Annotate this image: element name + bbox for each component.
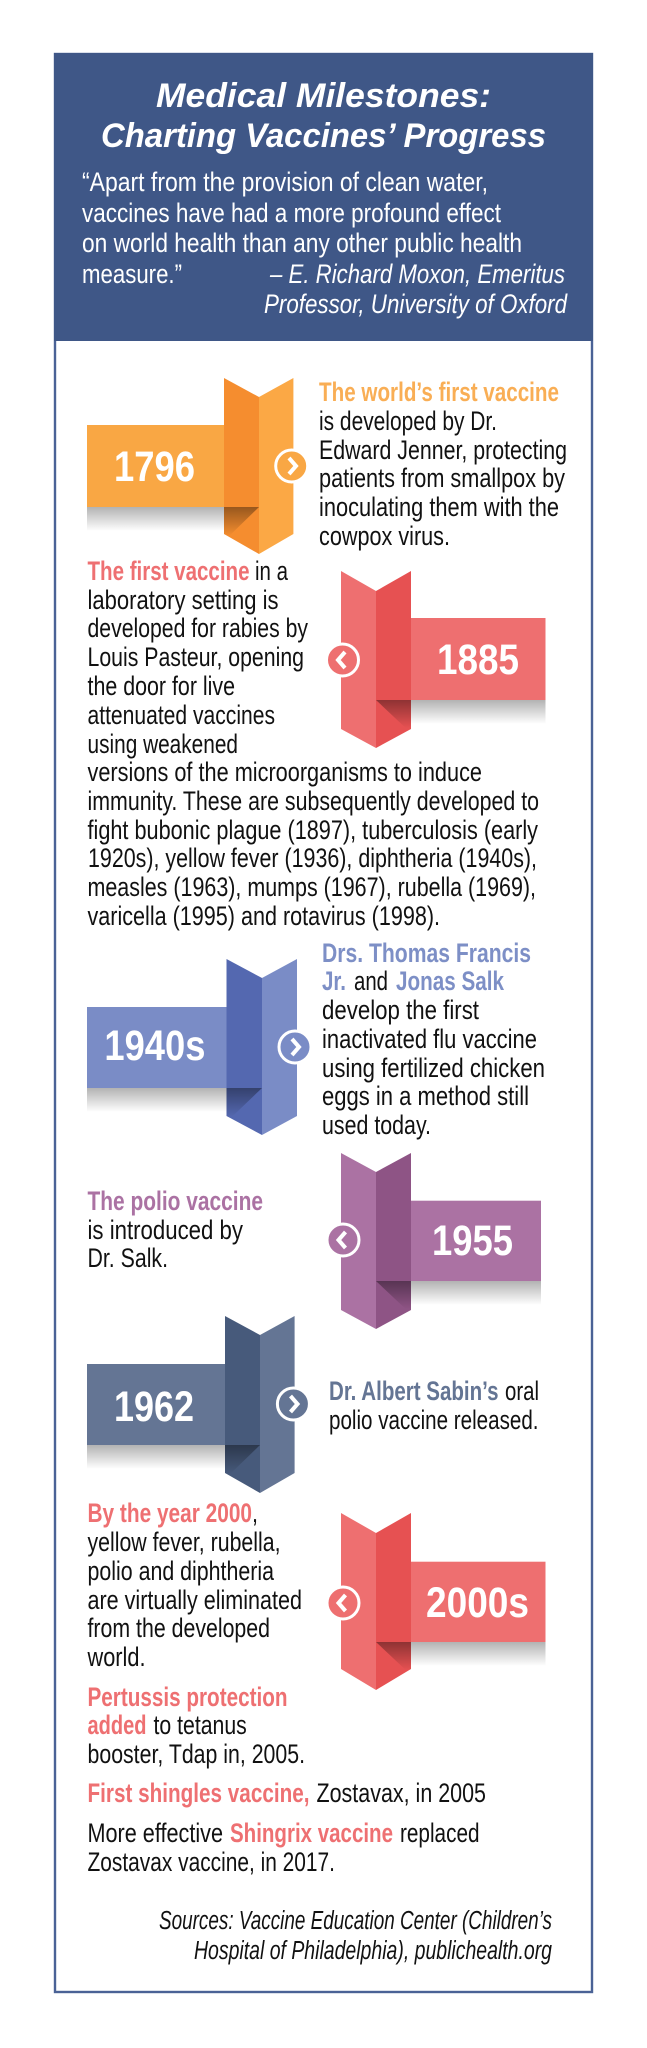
text: 1885: fight bubonic plague (1897), tuberculosis (early	[88, 815, 539, 845]
text: 1885: in a	[255, 556, 288, 586]
text: 1885: developed for rabies by	[88, 613, 309, 643]
text: 1885: versions of the microorganisms to induce	[88, 757, 482, 787]
text: 1940s: inactivated flu vaccine	[322, 1024, 537, 1054]
ribbon: 1955	[327, 1153, 541, 1329]
ribbon: 1796	[87, 378, 308, 554]
text: 2000s eradication: polio and diphtheria	[88, 1556, 274, 1586]
text: 2000s eradication: are virtually eliminated	[88, 1585, 302, 1615]
text: 1955: Dr. Salk.	[88, 1243, 168, 1273]
text: 1796: inoculating them with the	[319, 492, 559, 522]
title: Medical Milestones:	[156, 77, 491, 115]
text: 1796: Edward Jenner, protecting	[319, 435, 567, 465]
text: 2000s eradication: from the developed	[88, 1613, 270, 1643]
text: first shingles vaccine: First shingles vaccine,	[88, 1778, 310, 1808]
text: 1940s: and	[354, 966, 388, 996]
text: 1885: attenuated vaccines	[88, 700, 275, 730]
text: 1796: The world’s first vaccine	[319, 377, 559, 407]
text: 1885: 1920s), yellow fever (1936), diphtheria (1940s),	[88, 843, 537, 873]
panel: page frame	[55, 54, 592, 1992]
ribbon: 1940s	[87, 959, 311, 1135]
quote attribution: Professor, University of Oxford	[264, 289, 568, 319]
title: Charting Vaccines’ Progress	[101, 117, 546, 155]
text: 1940s: Jonas Salk	[396, 966, 504, 996]
quote: “Apart from the provision of clean water,	[82, 167, 488, 197]
quote attribution: – E. Richard Moxon, Emeritus	[269, 259, 565, 289]
text: pertussis: to tetanus	[154, 1710, 247, 1740]
ribbon: 1962	[87, 1316, 309, 1493]
text: 1940s: Drs. Thomas Francis	[322, 938, 531, 968]
ribbon: 2000s: 2000s	[426, 1579, 529, 1627]
text: 1796: cowpox virus.	[319, 521, 450, 551]
text: 1955: is introduced by	[88, 1215, 244, 1245]
text: 2000s eradication: yellow fever, rubella,	[88, 1527, 280, 1557]
text: 1885: using weakened	[88, 729, 238, 759]
quote attribution	[264, 259, 568, 319]
text: 1940s: used today.	[322, 1110, 431, 1140]
panel: header	[54, 53, 593, 341]
text: Shingrix: More effective	[88, 1818, 223, 1848]
quote: measure.”	[82, 259, 182, 289]
ribbon: 1940s: 1940s	[104, 1022, 205, 1070]
ribbon: 1962: 1962	[114, 1383, 194, 1431]
text: 1962: oral	[505, 1376, 539, 1406]
text: Shingrix: Zostavax vaccine, in 2017.	[88, 1847, 335, 1877]
text: pertussis: Pertussis protection	[88, 1682, 288, 1712]
text: 2000s eradication: ,	[252, 1498, 258, 1528]
quote	[82, 167, 522, 289]
text: 1940s	[322, 938, 545, 1140]
ribbon: 1955: 1955	[432, 1217, 513, 1265]
text: 1962	[329, 1376, 539, 1435]
ribbon: 1885	[326, 571, 546, 748]
text: 1962: Dr. Albert Sabin’s	[329, 1376, 498, 1406]
text: 1885: varicella (1995) and rotavirus (1998).	[88, 901, 440, 931]
text: 1885: The first vaccine	[88, 556, 250, 586]
text: 1885: laboratory setting is	[88, 585, 278, 615]
sources	[159, 1907, 552, 1965]
text: 1955: The polio vaccine	[88, 1186, 263, 1216]
text: Shingrix: Shingrix vaccine	[230, 1818, 393, 1848]
quote: on world health than any other public health	[82, 228, 522, 258]
text: 1796: patients from smallpox by	[319, 463, 566, 493]
text: Shingrix	[88, 1818, 480, 1877]
text: 1796	[319, 377, 567, 551]
text: 1885: the door for live	[88, 671, 235, 701]
ribbon: 1885: 1885	[437, 636, 519, 684]
text: 1940s: Jr.	[322, 966, 346, 996]
text: 1940s: using fertilized chicken	[322, 1053, 545, 1083]
text: 1955	[88, 1186, 263, 1273]
ribbon: 2000s	[327, 1513, 546, 1690]
title	[101, 77, 546, 155]
text: 1962: polio vaccine released.	[329, 1405, 538, 1435]
text: 1940s: eggs in a method still	[322, 1081, 529, 1111]
text: 2000s eradication	[87, 1498, 302, 1672]
ribbon: 1796: 1796	[114, 443, 195, 491]
text: 1885: immunity. These are subsequently developed to	[88, 786, 539, 816]
text: pertussis	[88, 1682, 305, 1769]
text: 2000s eradication: By the year 2000	[88, 1498, 252, 1528]
text: 1885: Louis Pasteur, opening	[88, 642, 304, 672]
text: 2000s eradication: world.	[87, 1642, 146, 1672]
text: first shingles vaccine: Zostavax, in 2005	[316, 1778, 486, 1808]
text: Shingrix: replaced	[400, 1818, 480, 1848]
text: pertussis: added	[88, 1710, 146, 1740]
text: 1885	[88, 556, 539, 931]
quote: vaccines have had a more profound effect	[82, 198, 502, 228]
text: pertussis: booster, Tdap in, 2005.	[88, 1739, 305, 1769]
text: 1796: is developed by Dr.	[319, 406, 497, 436]
text: 1940s: develop the first	[322, 995, 480, 1025]
text: 1885: measles (1963), mumps (1967), rubella (1969),	[88, 872, 536, 902]
